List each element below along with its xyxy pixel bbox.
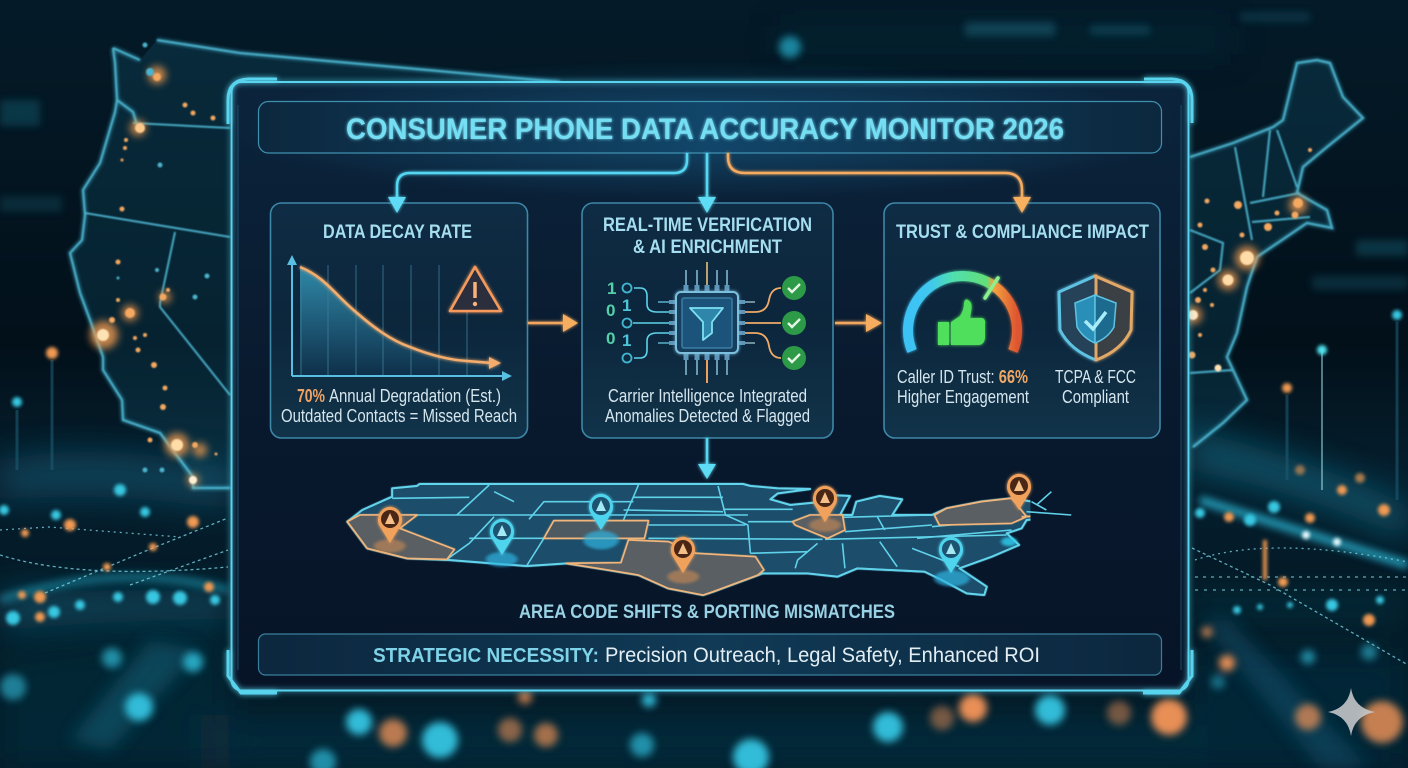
city lights west <box>90 42 218 486</box>
pin: Illinois <box>813 486 837 522</box>
heading: data decay rate: DATA DECAY RATE <box>323 221 472 243</box>
caption: carrier intelligence: Carrier Intelligence Integrated <box>608 386 807 406</box>
arrow: title to data decay <box>388 153 687 213</box>
heading: trust and compliance: TRUST & COMPLIANCE IMPACT <box>896 221 1149 243</box>
panel: trust and compliance <box>884 203 1160 438</box>
icon: chip with funnel <box>676 292 738 353</box>
binary inputs: 0 <box>606 329 615 348</box>
frame border <box>228 79 1192 693</box>
binary inputs <box>606 279 632 362</box>
bottom strategic bar <box>258 634 1162 675</box>
caption: anomalies: Anomalies Detected & Flagged <box>605 406 810 426</box>
USA area code map <box>347 474 1094 595</box>
arrow: verification to map <box>698 438 716 479</box>
binary inputs: 0 <box>606 301 615 320</box>
title bar <box>258 102 1162 153</box>
northeast map <box>1184 60 1363 450</box>
icon: warning triangle <box>450 267 501 311</box>
icon: trust gauge <box>908 276 1017 351</box>
pin: Texas <box>671 537 695 573</box>
icon: green checks <box>782 276 806 370</box>
input connectors <box>633 288 673 358</box>
west coast map <box>70 40 560 488</box>
panel: data decay rate <box>270 203 528 438</box>
main panel <box>225 60 1192 693</box>
caption: caller ID trust: Caller ID Trust: 66% <box>897 367 1028 387</box>
caption: TCPA and FCC: TCPA & FCC <box>1055 367 1136 387</box>
panel: data decay rate: Annual Degradation (Est.) <box>329 386 501 406</box>
strategic necessity label: STRATEGIC NECESSITY: <box>373 645 599 667</box>
binary inputs: 1 <box>607 279 616 298</box>
caption: higher engagement: Higher Engagement <box>897 387 1029 407</box>
panel body <box>232 83 1188 690</box>
arrow: title to trust <box>728 153 1031 213</box>
caption: missed reach: Outdated Contacts = Missed Reach <box>281 406 517 426</box>
icon: sparkle watermark <box>1328 688 1375 736</box>
pin: New York <box>1007 474 1031 510</box>
arrow: verification to trust <box>835 314 882 332</box>
panel: verification and enrichment <box>582 203 833 438</box>
city lights east <box>1184 148 1312 372</box>
chip pins <box>686 262 727 383</box>
caption: compliant: Compliant <box>1062 387 1129 407</box>
heading: real-time verification: REAL-TIME VERIFICATION <box>603 214 812 236</box>
arrow: decay to verification <box>528 314 578 332</box>
heading: AI enrichment: & AI ENRICHMENT <box>633 236 782 258</box>
pin: Wyoming <box>589 494 613 530</box>
highlighted states <box>347 498 1071 595</box>
icon: compliance shield <box>1059 276 1132 360</box>
decay chart <box>287 255 512 381</box>
title text: CONSUMER PHONE DATA ACCURACY MONITOR 2026 <box>346 113 1064 146</box>
output connectors <box>742 288 781 358</box>
pin: Georgia <box>939 537 963 573</box>
pin: California <box>378 507 402 543</box>
binary inputs: 1 <box>622 296 631 315</box>
caption: annual degradation: 70% <box>297 386 325 406</box>
blurred data points <box>0 310 1403 768</box>
binary inputs: 1 <box>622 331 631 350</box>
arrow: title to verification <box>698 153 716 213</box>
strategic necessity text: Precision Outreach, Legal Safety, Enhanced ROI <box>605 644 1040 667</box>
pin: Utah <box>490 519 514 555</box>
map label: AREA CODE SHIFTS & PORTING MISMATCHES <box>519 602 895 623</box>
